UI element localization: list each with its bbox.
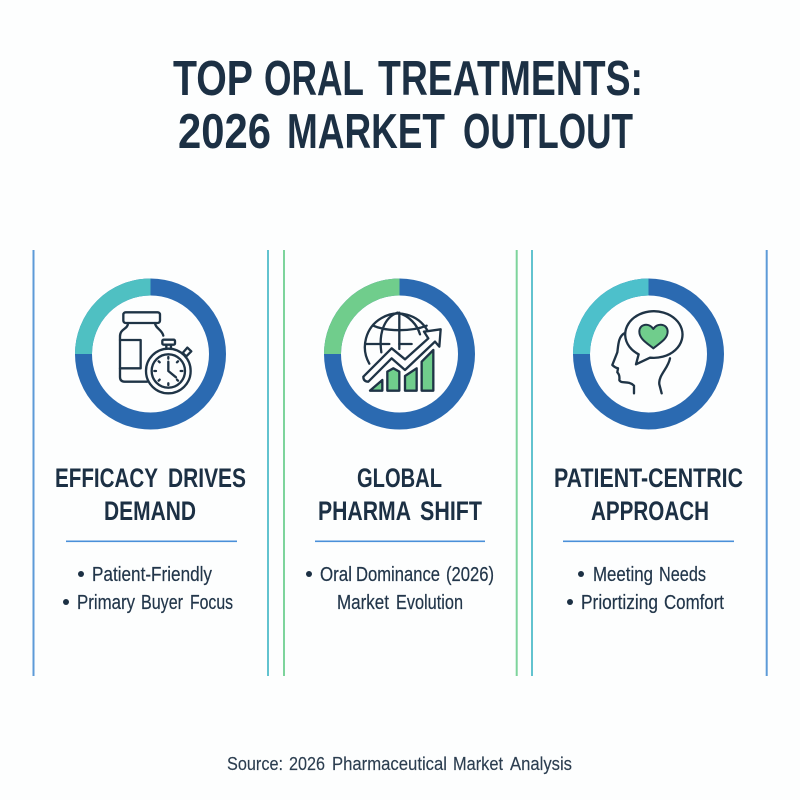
- title: [173, 52, 643, 159]
- source note: 2026: [289, 753, 325, 774]
- heading: global pharma shift: SHIFT: [420, 496, 482, 526]
- heading: efficacy drives demand: [55, 463, 246, 526]
- bullet list: patient: Priortizing: [581, 592, 658, 614]
- bullet list: global: Oral: [320, 564, 352, 586]
- bullet list: efficacy: [63, 564, 233, 614]
- panel: patient-centric approach: [531, 250, 768, 676]
- bullet list: global: Evolution: [396, 592, 463, 614]
- heading: efficacy drives demand: DEMAND: [104, 496, 196, 526]
- heading: global pharma shift: GLOBAL: [357, 463, 442, 493]
- donut ring: patient: [581, 287, 716, 421]
- bullet list: global: (2026): [446, 564, 494, 586]
- bullet list: patient: Meeting: [593, 564, 653, 586]
- icon: globe and growth arrow: [363, 313, 441, 391]
- bullet list: efficacy: Patient-Friendly: [92, 564, 212, 586]
- bullet list: efficacy: Focus: [190, 592, 233, 614]
- heading: patient-centric approach: PATIENT-CENTRIC: [554, 463, 743, 493]
- source note: Pharmaceutical: [332, 753, 447, 774]
- panel: global pharma shift: [283, 250, 518, 676]
- source note: [227, 753, 572, 774]
- heading: efficacy drives demand: DRIVES: [168, 463, 246, 493]
- donut ring: efficacy: [84, 287, 218, 421]
- title: MARKET: [287, 105, 445, 159]
- bullet list: global: Market: [337, 592, 389, 614]
- title: 2026: [178, 105, 271, 159]
- icon: bottle and stopwatch: [120, 312, 191, 393]
- donut ring: global: [332, 287, 466, 421]
- icon: head with heart speech bubble: [612, 311, 683, 393]
- title: TREATMENTS:: [378, 52, 643, 106]
- bullet list: global: [306, 564, 494, 614]
- heading: efficacy drives demand: EFFICACY: [55, 463, 158, 493]
- source note: Analysis: [510, 753, 572, 774]
- heading: global pharma shift: [318, 463, 482, 526]
- heading: global pharma shift: PHARMA: [318, 496, 411, 526]
- title: ORAL: [264, 52, 364, 106]
- bullet list: global: Dominance: [356, 564, 440, 586]
- title: TOP: [173, 52, 253, 106]
- heading: patient-centric approach: [554, 463, 743, 526]
- bullet list: patient: [567, 564, 724, 614]
- source note: Market: [453, 753, 503, 774]
- bullet list: efficacy: Primary: [77, 592, 135, 614]
- heading: patient-centric approach: APPROACH: [591, 496, 709, 526]
- title: OUTLOUT: [463, 105, 633, 159]
- source note: Source:: [227, 753, 283, 774]
- bullet list: patient: Comfort: [664, 592, 724, 614]
- bullet list: efficacy: Buyer: [141, 592, 183, 614]
- bullet list: patient: Needs: [659, 564, 706, 586]
- panel: efficacy drives demand: [32, 250, 269, 676]
